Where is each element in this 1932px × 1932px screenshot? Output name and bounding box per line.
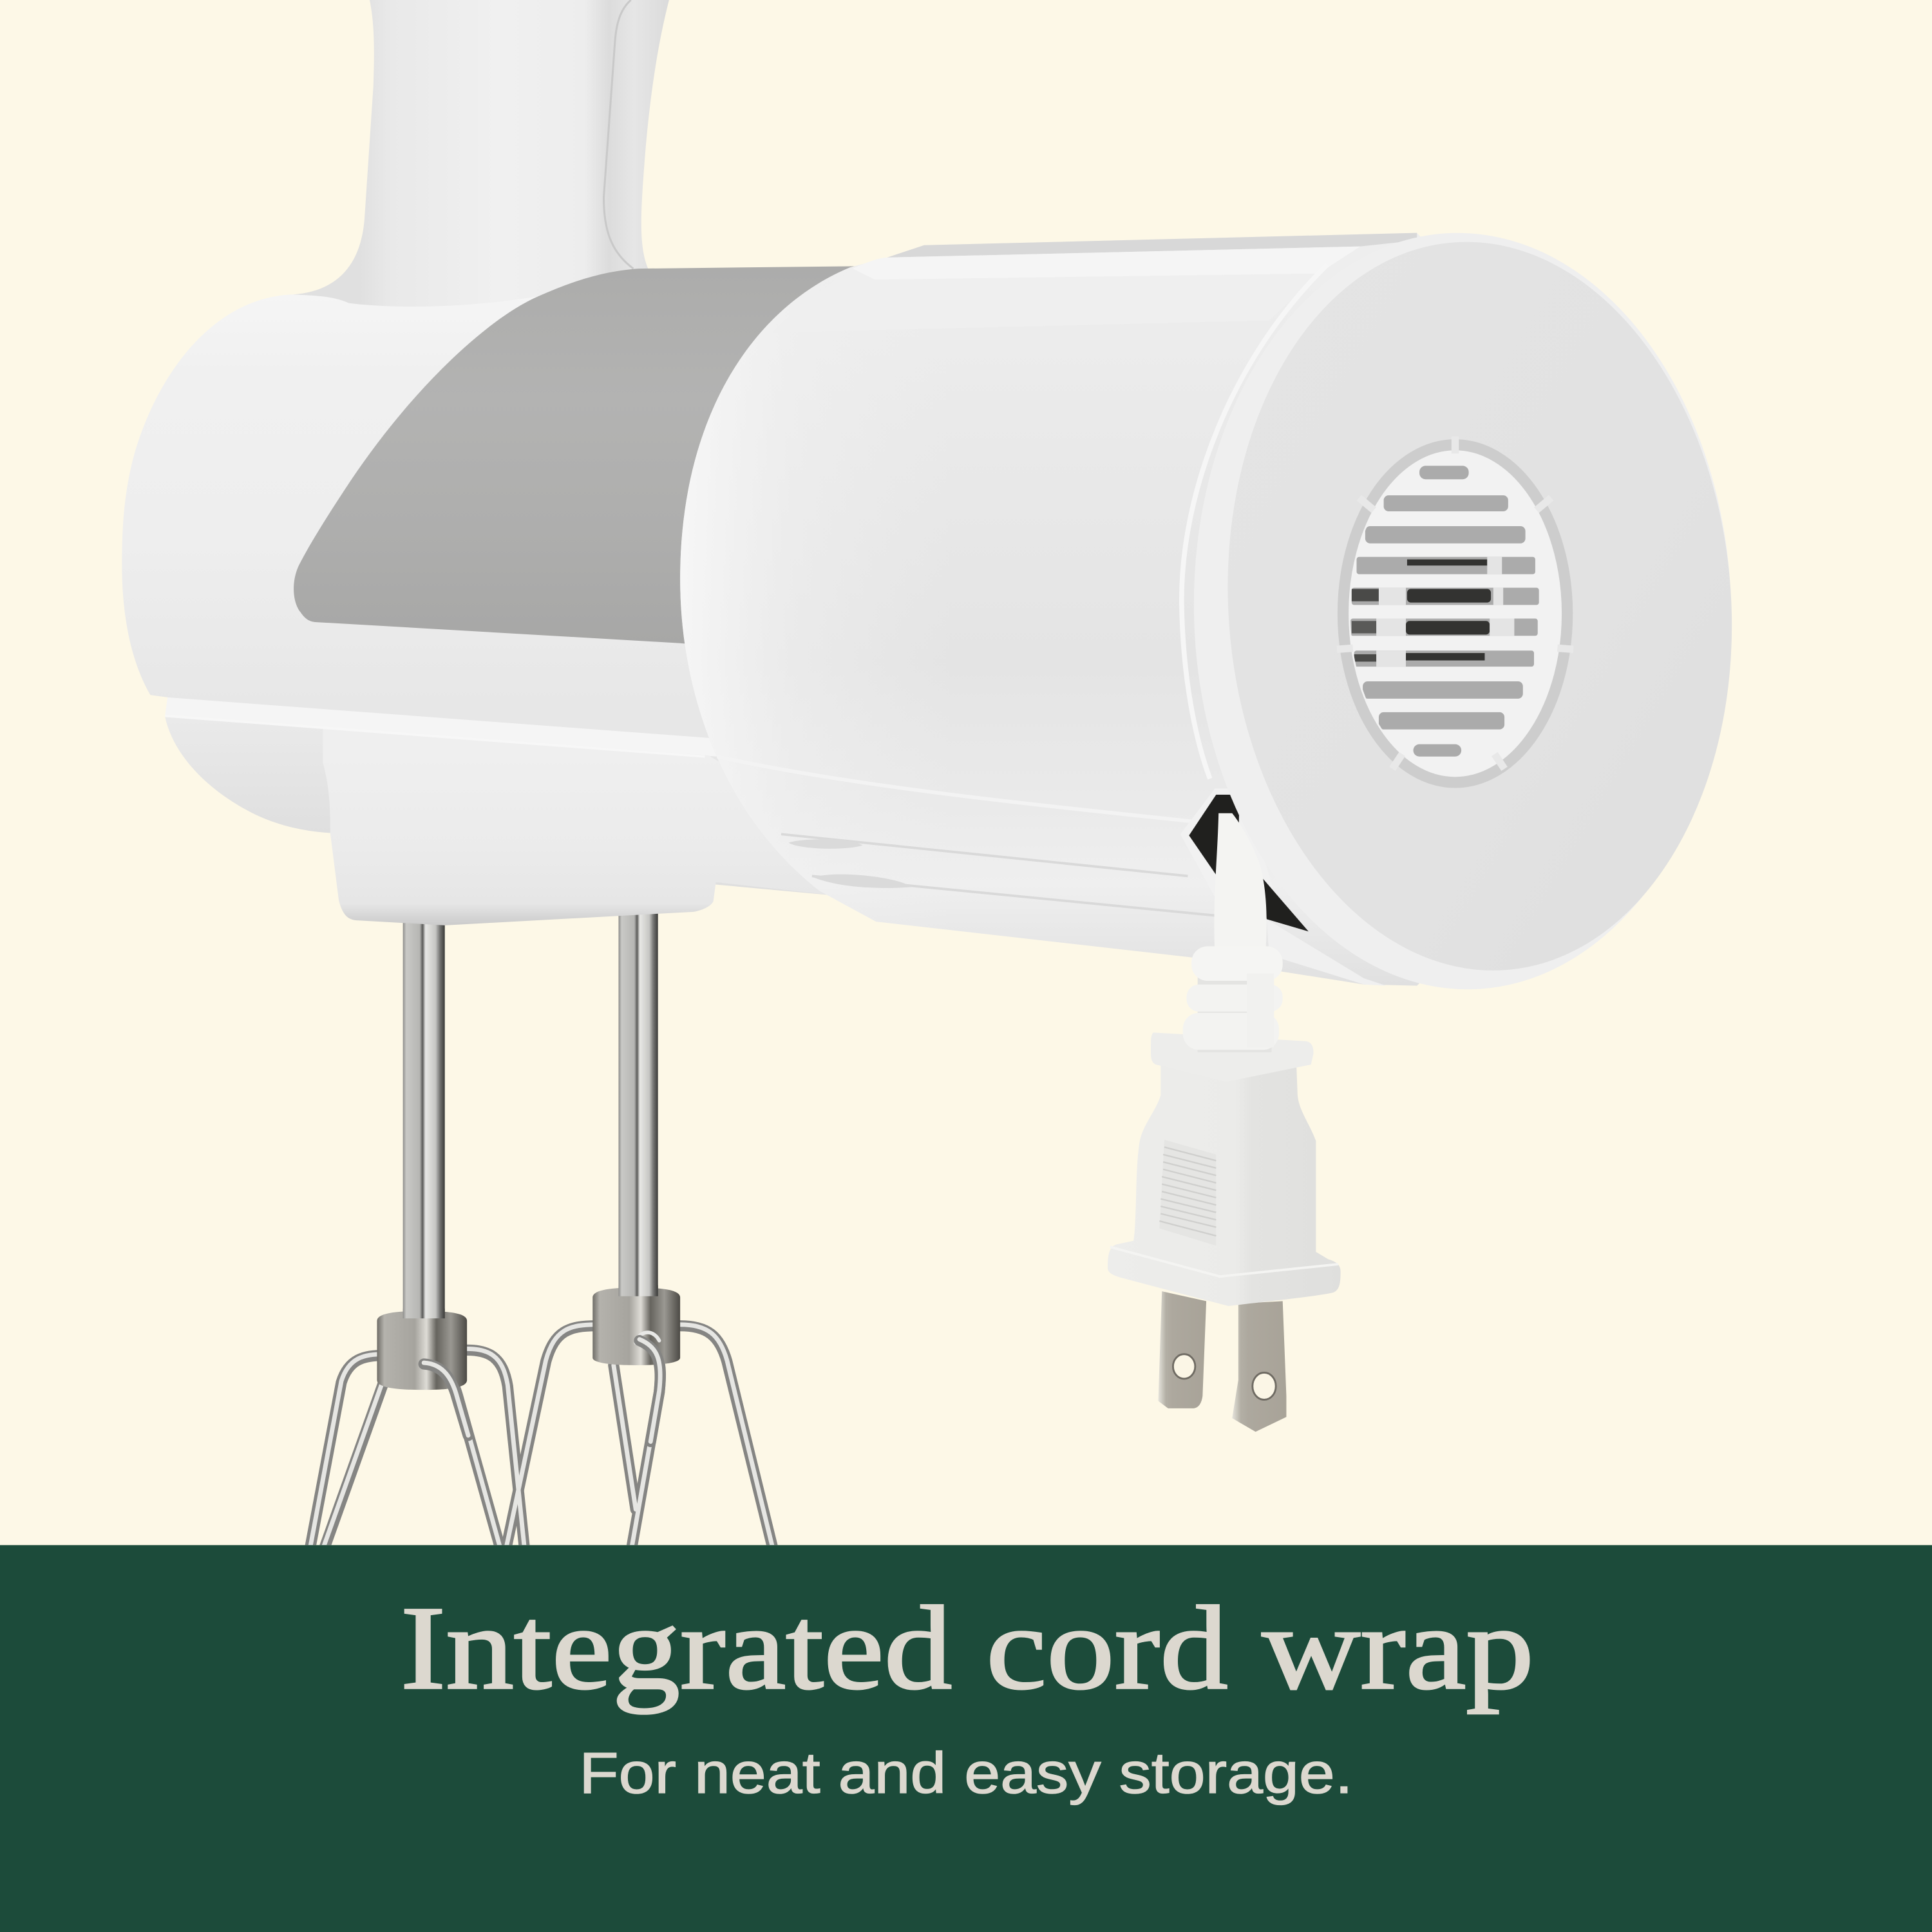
seam shading over foot xyxy=(165,716,705,757)
plug top flange xyxy=(1151,1032,1314,1082)
beater shafts xyxy=(403,912,658,1318)
power plug xyxy=(1108,946,1341,1432)
handle side groove xyxy=(604,0,633,269)
heading: Integrated cord wrap xyxy=(401,1582,1534,1714)
rear body housing xyxy=(122,269,788,764)
top gray sliver xyxy=(887,233,1417,258)
top white band xyxy=(853,247,1360,279)
vent inner ring xyxy=(1349,451,1561,776)
plug lower flange edge xyxy=(1110,1247,1338,1276)
cream background xyxy=(0,0,1932,1545)
main cylinder xyxy=(680,233,1540,986)
second glossy band xyxy=(773,269,1318,333)
seam lip xyxy=(165,697,733,758)
disc face xyxy=(1204,225,1756,987)
cord xyxy=(1214,813,1267,955)
lower skirt of body xyxy=(165,697,838,896)
beaters xyxy=(309,912,774,1553)
vent slits xyxy=(1350,466,1539,757)
mixer foot xyxy=(323,727,838,925)
beater wires xyxy=(309,1325,774,1553)
vent outer ring xyxy=(1343,445,1567,782)
vent ring gaps xyxy=(1337,436,1573,769)
cylinder end lip xyxy=(1182,265,1327,779)
green banner xyxy=(0,1545,1932,1932)
cord wrap slot xyxy=(1180,788,1386,986)
hand mixer illustration xyxy=(122,0,1756,1553)
beater collars xyxy=(377,1285,680,1390)
light inner reflections xyxy=(1376,557,1514,667)
strain relief rings xyxy=(1183,946,1283,1052)
end disc xyxy=(1184,225,1756,996)
plug grip ridges xyxy=(1159,1140,1216,1245)
vent grille xyxy=(1337,436,1573,782)
lower tray under disc xyxy=(1267,919,1386,986)
plug body xyxy=(1108,1059,1341,1306)
subheading: For neat and easy storage. xyxy=(579,1741,1353,1806)
gray side panel xyxy=(294,266,862,653)
lower ribs xyxy=(717,757,1215,916)
front wire loops xyxy=(424,1332,660,1442)
plug blades xyxy=(1158,1291,1286,1432)
dark motor gaps xyxy=(1352,560,1491,661)
mixer handle xyxy=(293,0,669,307)
